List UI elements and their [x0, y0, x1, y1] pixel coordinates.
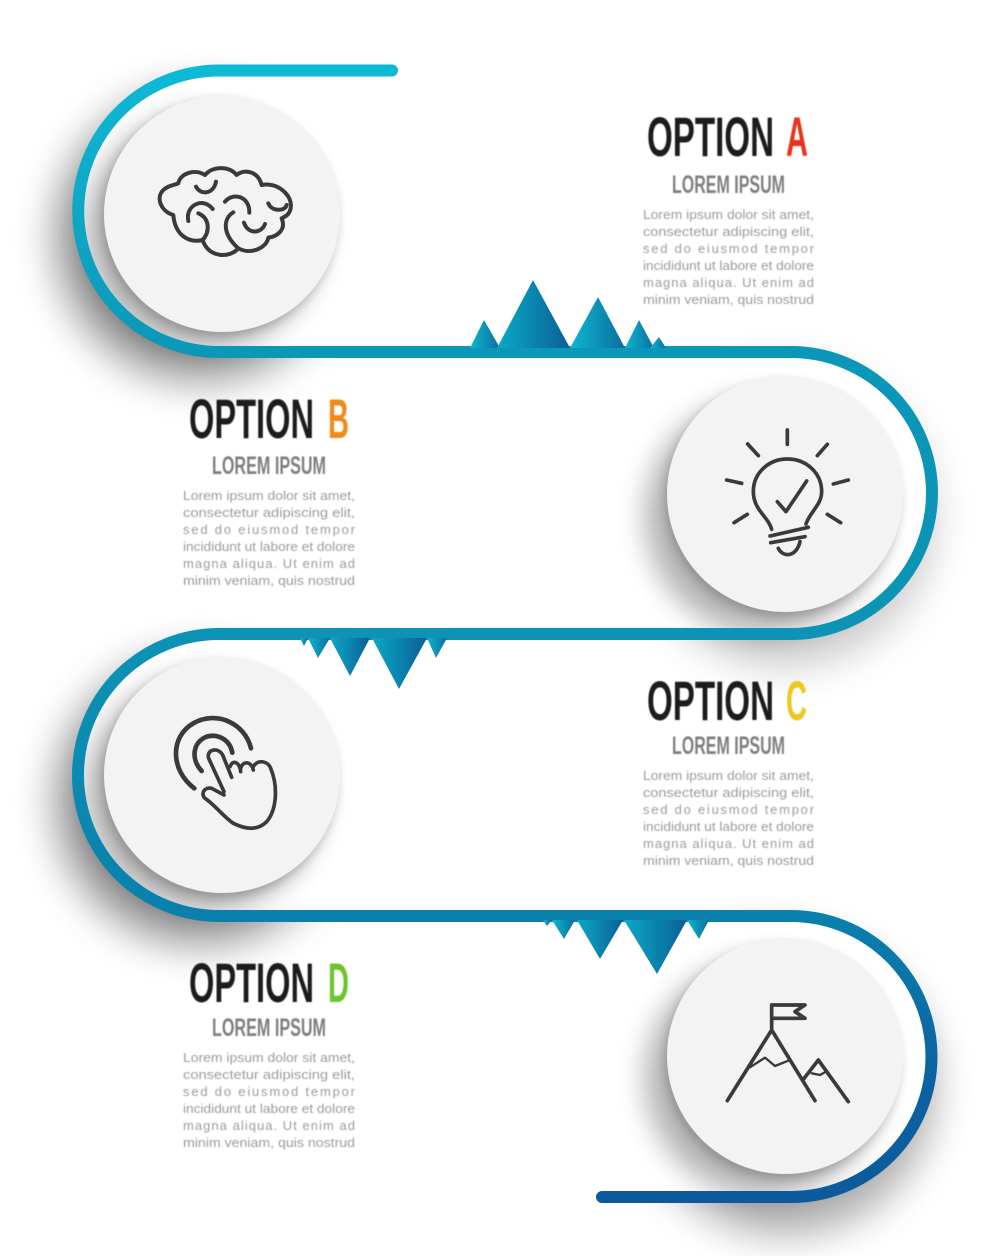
body text: option C: minim veniam, quis nostrud [643, 853, 814, 868]
body text: option C: sed do eiusmod tempor [643, 802, 815, 817]
body text: option A: magna aliqua. Ut enim ad [643, 275, 814, 290]
body text: option C: incididunt ut labore et dolore [643, 819, 814, 834]
body text: option D: sed do eiusmod tempor [183, 1084, 356, 1099]
icon: brain [160, 168, 291, 255]
panel: circle D [667, 938, 903, 1174]
body text: option B [183, 488, 356, 588]
icon: pointing hand with touch rings [176, 718, 275, 828]
text block: option A [643, 105, 815, 307]
subheading: option B: LOREM IPSUM [212, 452, 326, 480]
panel: circle B [667, 376, 903, 612]
body text: option A: minim veniam, quis nostrud [643, 292, 814, 307]
body text: option A: Lorem ipsum dolor sit amet, [643, 207, 814, 222]
body text: option B: consectetur adipiscing elit, [183, 505, 355, 520]
body text: option C: Lorem ipsum dolor sit amet, [643, 768, 814, 783]
panel: circle A [104, 96, 340, 332]
white interiors of ribbon bends [78, 70, 932, 1197]
body text: option D: incididunt ut labore et dolore [183, 1101, 355, 1116]
heading: option A: OPTION [647, 105, 774, 168]
icon: light bulb with check [727, 430, 848, 555]
icon: mountain with flag [727, 1005, 848, 1102]
text block: option D [183, 951, 356, 1150]
body text: option C: magna aliqua. Ut enim ad [643, 836, 814, 851]
body text: option B: Lorem ipsum dolor sit amet, [183, 488, 355, 503]
heading: option C: OPTION [647, 669, 774, 732]
panel: circle C [104, 657, 340, 893]
body text: option A: incididunt ut labore et dolore [643, 258, 814, 273]
peaks below ribbon: option C to D [543, 920, 709, 974]
heading: option A: A [786, 105, 808, 168]
body text: option D: minim veniam, quis nostrud [183, 1135, 355, 1150]
body text: option C: consectetur adipiscing elit, [643, 785, 814, 800]
body text: option A: consectetur adipiscing elit, [643, 224, 814, 239]
body text: option D: magna aliqua. Ut enim ad [183, 1118, 355, 1133]
body text: option B: incididunt ut labore et dolore [183, 539, 355, 554]
body text: option D: consectetur adipiscing elit, [183, 1067, 355, 1082]
peaks below ribbon: option B to C [300, 638, 447, 689]
text block: option B [183, 387, 356, 588]
body text: option D [183, 1050, 356, 1150]
body text: option B: magna aliqua. Ut enim ad [183, 556, 355, 571]
body text: option A: sed do eiusmod tempor [643, 241, 815, 256]
body text: option B: minim veniam, quis nostrud [183, 573, 355, 588]
body text: option A [643, 207, 815, 307]
body text: option B: sed do eiusmod tempor [183, 522, 356, 537]
heading: option C: C [786, 669, 807, 732]
body text: option D: Lorem ipsum dolor sit amet, [183, 1050, 355, 1065]
text block: option C [643, 669, 815, 868]
subheading: option C: LOREM IPSUM [672, 732, 785, 760]
subheading: option A: LOREM IPSUM [672, 171, 785, 199]
peaks above ribbon: option A to B [470, 280, 666, 348]
heading: option D: OPTION [189, 951, 314, 1014]
heading: option D: D [328, 951, 349, 1014]
heading: option B: OPTION [189, 387, 314, 450]
heading: option B: B [328, 387, 349, 450]
subheading: option D: LOREM IPSUM [212, 1014, 326, 1042]
body text: option C [643, 768, 815, 868]
circle shadows [85, 100, 901, 1196]
ribbon path [78, 70, 932, 1197]
